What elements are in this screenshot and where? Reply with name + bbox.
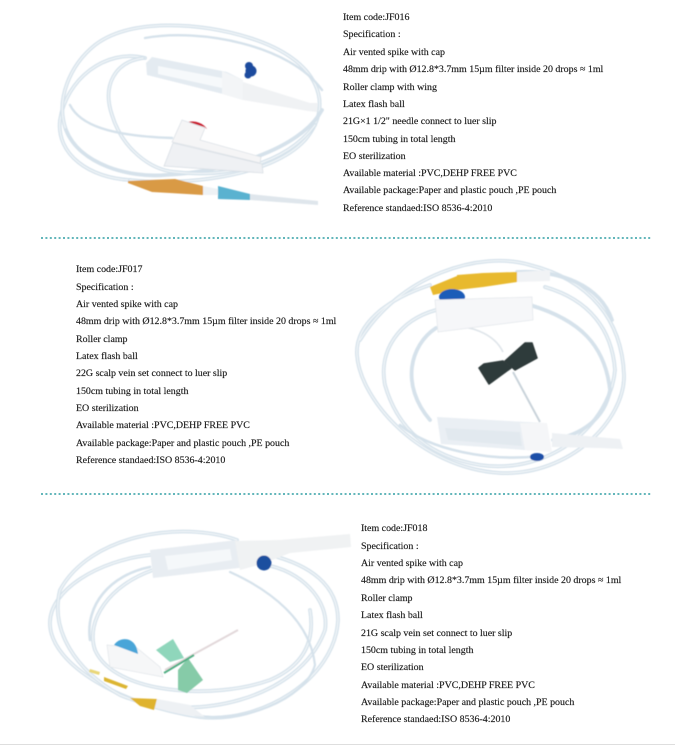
vent cap JF018: [256, 556, 272, 570]
spike JF017: [552, 433, 623, 449]
text block: JF017 specification: Air vented spike with cap: [76, 298, 178, 310]
text block: JF017 specification: EO sterilization: [76, 402, 139, 414]
flash ball JF018: [114, 639, 138, 654]
luer connector JF016: [128, 179, 203, 195]
text block: JF016 specification: 48mm drip with Ø12.8*3.7mm 15µm filter inside 20 drops ≈ 1ml: [343, 64, 603, 74]
text block: JF017 specification: [76, 264, 336, 466]
text block: JF018 specification: Item code:JF018: [361, 522, 427, 534]
flash ball JF017: [439, 289, 465, 305]
device: JF017 infusion set: [357, 261, 624, 473]
text block: JF017 specification: Reference standaed:ISO 8536-4:2010: [76, 454, 225, 466]
text block: JF016 specification: Available package:Paper and plastic pouch ,PE pouch: [343, 184, 556, 196]
drip chamber JF017: [437, 417, 552, 452]
text block: JF017 specification: Available material :PVC,DEHP FREE PVC: [76, 420, 250, 430]
text block: JF017 specification: 48mm drip with Ø12.8*3.7mm 15µm filter inside 20 drops ≈ 1ml: [76, 316, 336, 326]
text block: JF016 specification: Air vented spike with cap: [343, 46, 445, 58]
drip chamber JF018: [150, 540, 247, 578]
vent cap JF016: [244, 62, 256, 78]
text block: JF017 specification: Specification :: [76, 282, 134, 292]
text block: JF017 specification: 150cm tubing in total length: [76, 386, 188, 396]
thin tube JF017: [440, 327, 503, 352]
text block: JF017 specification: Item code:JF017: [76, 264, 142, 274]
text block: JF016 specification: Available material :PVC,DEHP FREE PVC: [343, 168, 517, 178]
roller clamp JF016: [164, 120, 263, 173]
text block: JF016 specification: Specification :: [343, 28, 401, 40]
text block: JF018 specification: Specification :: [361, 540, 419, 552]
text block: JF017 specification: Roller clamp: [76, 334, 128, 344]
text block: JF016 specification: 21G×1 1/2" needle connect to luer slip: [343, 116, 496, 126]
text block: JF017 specification: 22G scalp vein set connect to luer slip: [76, 368, 227, 378]
vent cap JF017: [530, 453, 544, 461]
text block: JF017 specification: Latex flash ball: [76, 350, 138, 362]
text block: JF016 specification: EO sterilization: [343, 150, 406, 162]
text block: JF016 specification: Item code:JF016: [343, 12, 409, 22]
spike JF018: [235, 534, 351, 570]
text block: JF018 specification: Available package:Paper and plastic pouch ,PE pouch: [361, 696, 574, 708]
tubing loops JF016: [60, 25, 322, 182]
text block: JF016 specification: Latex flash ball: [343, 98, 405, 110]
text block: JF018 specification: 150cm tubing in total length: [361, 644, 473, 656]
luer connector JF017: [430, 270, 550, 295]
needle JF018: [165, 630, 238, 670]
device: JF018 infusion set: [50, 532, 351, 718]
needle JF017: [513, 372, 540, 422]
text block: JF018 specification: Available material :PVC,DEHP FREE PVC: [361, 680, 535, 690]
butterfly wings JF018: [156, 639, 203, 693]
divider: [41, 237, 652, 239]
text block: JF018 specification: Reference standaed:ISO 8536-4:2010: [361, 714, 510, 724]
butterfly wings JF017: [479, 343, 537, 384]
text block: JF018 specification: Roller clamp: [361, 592, 413, 604]
tubing loops JF018: [50, 532, 338, 718]
text block: JF018 specification: 21G scalp vein set connect to luer slip: [361, 628, 512, 638]
text block: JF018 specification: 48mm drip with Ø12.8*3.7mm 15µm filter inside 20 drops ≈ 1ml: [361, 574, 621, 586]
spike JF016: [243, 82, 318, 112]
divider: [41, 493, 652, 495]
text block: JF018 specification: [361, 522, 622, 724]
text block: JF017 specification: Available package:Paper and plastic pouch ,PE pouch: [76, 438, 289, 448]
tubing loops JF017: [357, 261, 624, 473]
roller clamp JF018: [107, 645, 163, 677]
text block: JF016 specification: [343, 12, 604, 214]
drip chamber JF016: [146, 57, 243, 100]
text block: JF018 specification: Latex flash ball: [361, 610, 423, 620]
needle JF016: [203, 186, 318, 205]
roller clamp JF017: [435, 297, 533, 332]
text block: JF016 specification: Roller clamp with wing: [343, 82, 437, 92]
text block: JF016 specification: 150cm tubing in total length: [343, 134, 455, 144]
text block: JF016 specification: Reference standaed:ISO 8536-4:2010: [343, 202, 492, 214]
bottom edge: [0, 744, 675, 745]
text block: JF018 specification: EO sterilization: [361, 662, 424, 672]
device: JF016 infusion set: [60, 25, 322, 205]
yellow connector JF018: [89, 669, 205, 717]
text block: JF018 specification: Air vented spike with cap: [361, 558, 463, 568]
